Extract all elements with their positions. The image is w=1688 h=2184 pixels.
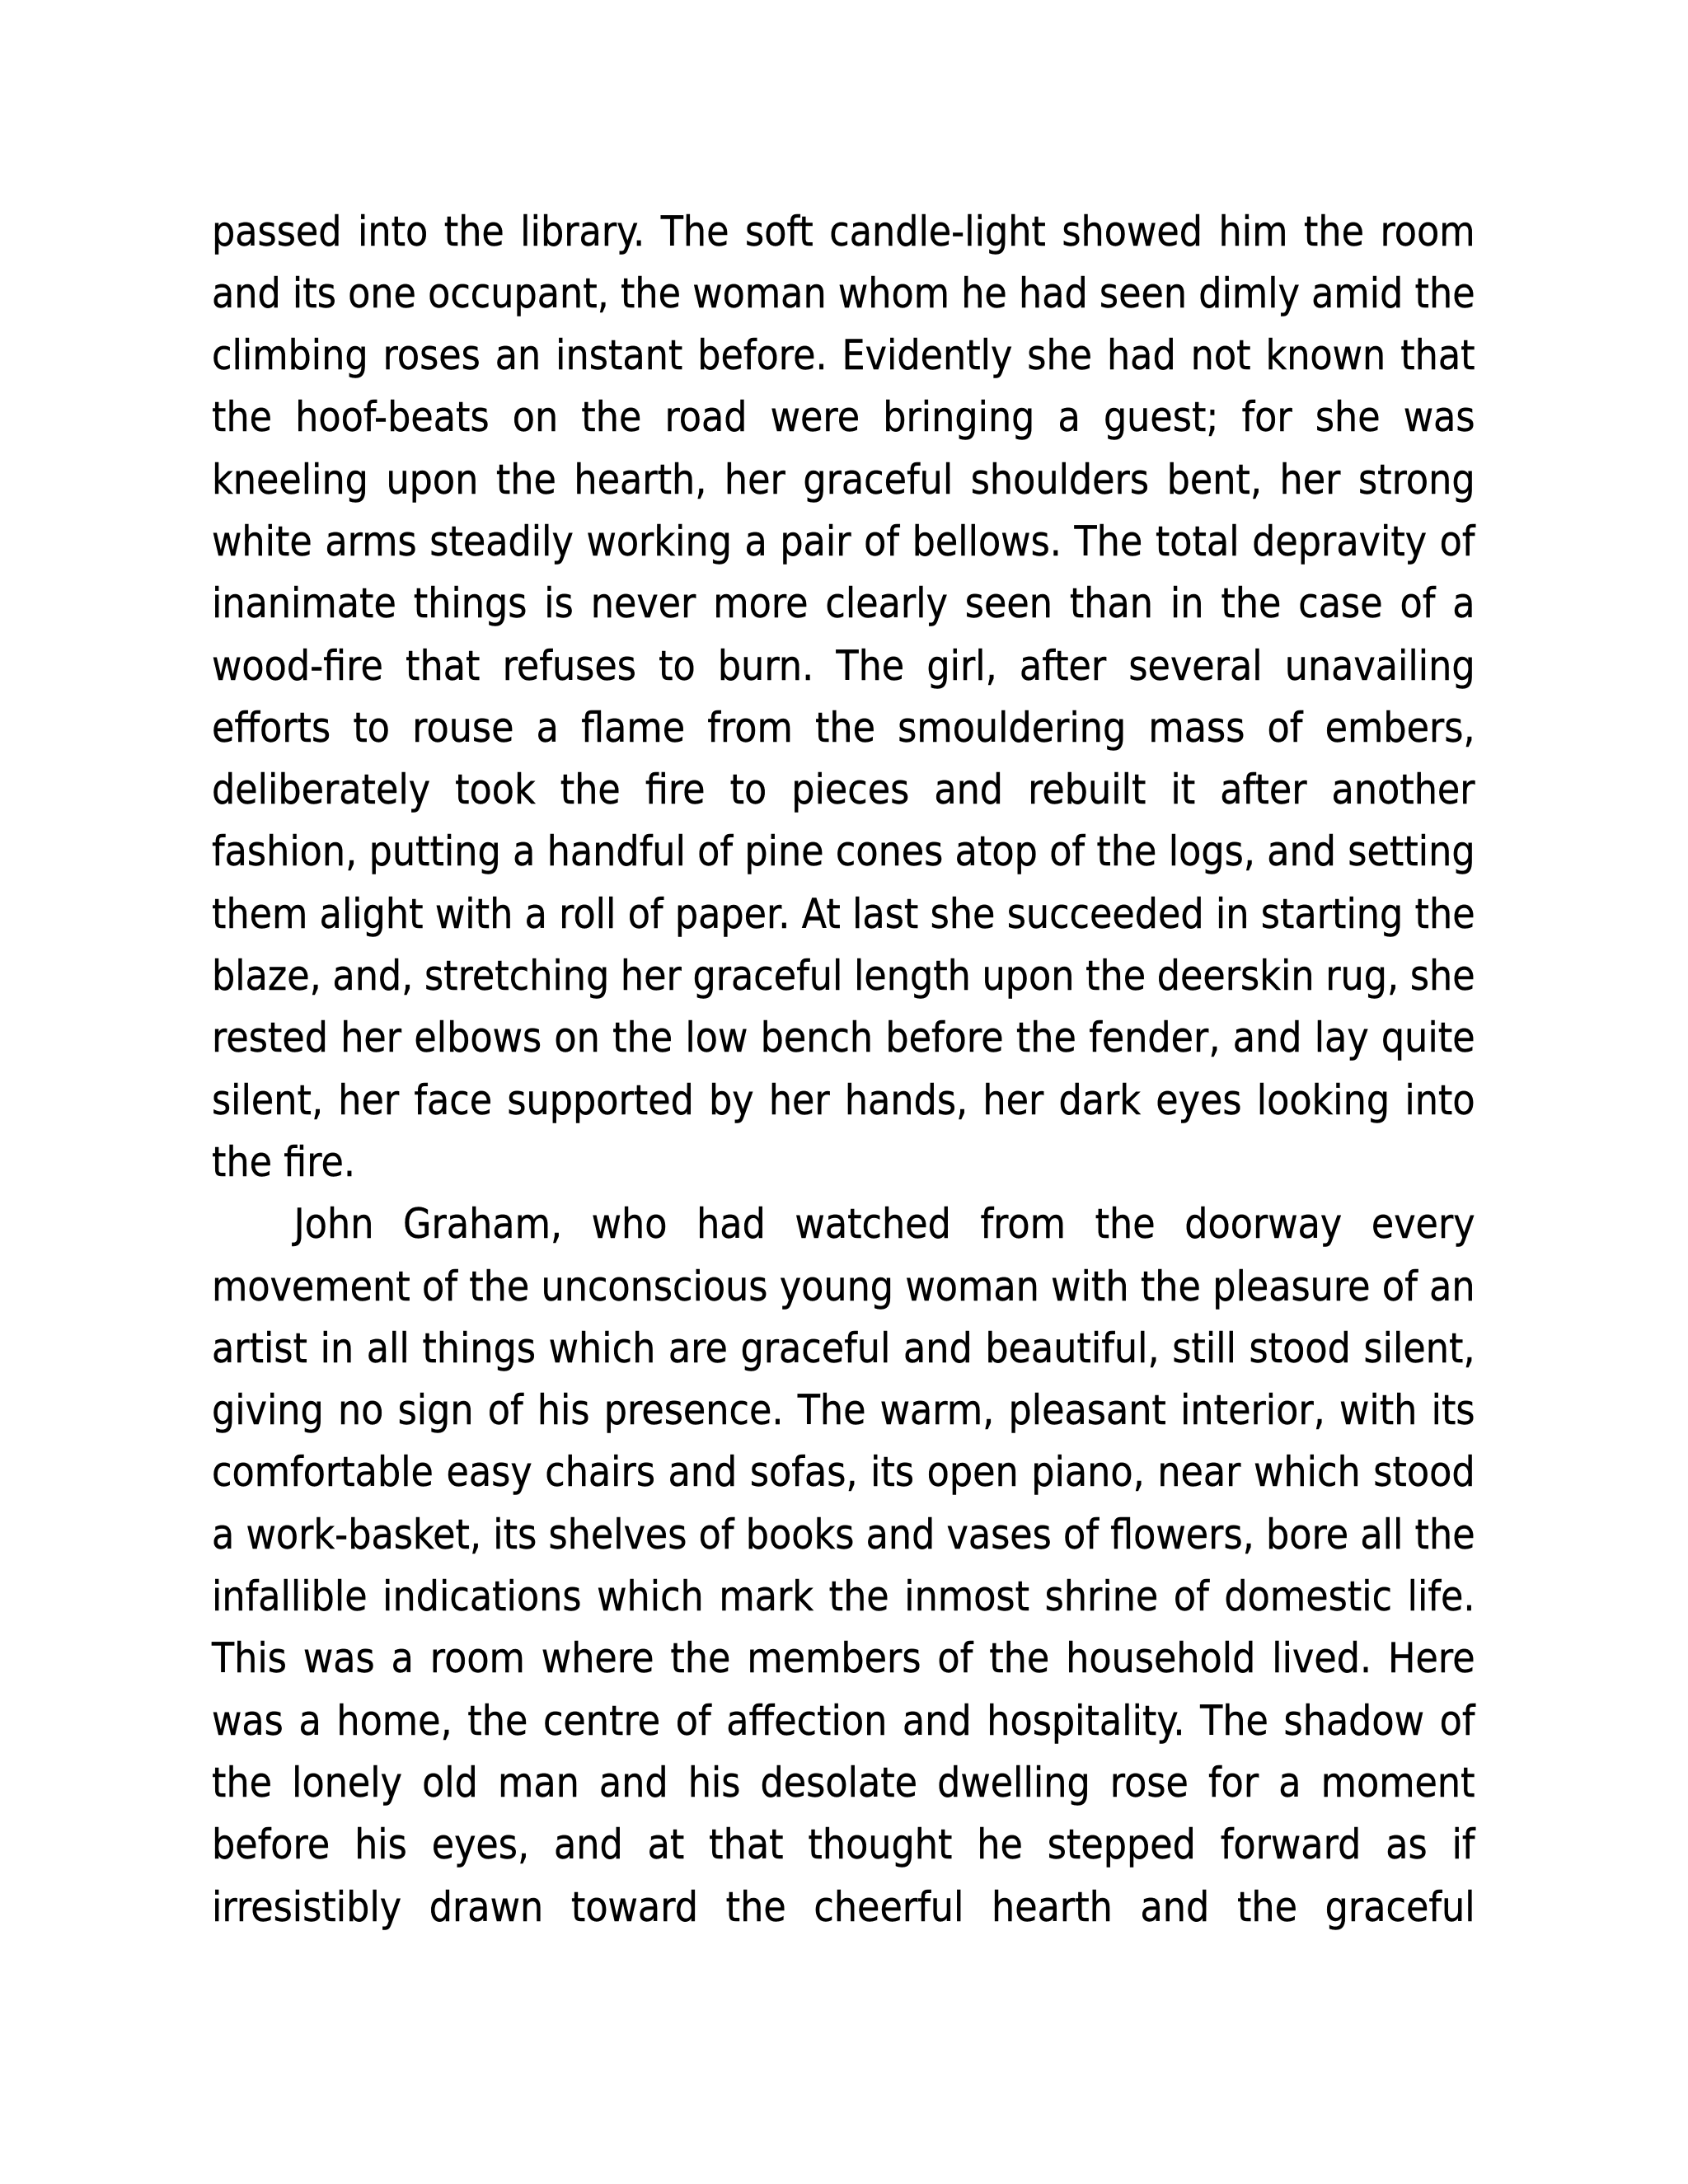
text block: first paragraph: efforts to rouse a flame from the smouldering mass of embers, <box>212 704 1475 752</box>
text block: first paragraph: fashion, putting a handful of pine cones atop of the logs, and setting <box>212 827 1475 875</box>
text block: first paragraph: inanimate things is never more clearly seen than in the case of a <box>212 579 1475 627</box>
text block: second paragraph: irresistibly drawn toward the cheerful hearth and the graceful <box>212 1883 1475 1931</box>
text block: second paragraph: comfortable easy chairs and sofas, its open piano, near which stood <box>212 1448 1475 1496</box>
text block: second paragraph: artist in all things which are graceful and beautiful, still stood silent, <box>212 1324 1475 1372</box>
text block: second paragraph: movement of the unconscious young woman with the pleasure of an <box>212 1263 1475 1310</box>
text block: first paragraph: blaze, and, stretching her graceful length upon the deerskin rug, she <box>212 952 1475 1000</box>
text block: first paragraph: them alight with a roll of paper. At last she succeeded in starting the <box>212 890 1475 938</box>
text block: second paragraph: was a home, the centre of affection and hospitality. The shadow of <box>212 1697 1475 1745</box>
text block: first paragraph: passed into the library. The soft candle-light showed him the room <box>212 208 1475 255</box>
text block: second paragraph: This was a room where the members of the household lived. Here <box>212 1634 1475 1682</box>
text block: second paragraph: before his eyes, and at that thought he stepped forward as if <box>212 1821 1475 1868</box>
text block: first paragraph: rested her elbows on the low bench before the fender, and lay quite <box>212 1014 1475 1062</box>
text block: first paragraph: the fire. <box>212 1138 355 1186</box>
text block: first paragraph: wood-fire that refuses to burn. The girl, after several unavailing <box>212 642 1475 690</box>
text block: first paragraph: the hoof-beats on the road were bringing a guest; for she was <box>212 393 1475 441</box>
text block: second paragraph: a work-basket, its shelves of books and vases of flowers, bore all the <box>212 1511 1475 1558</box>
text block: second paragraph: John Graham, who had watched from the doorway every <box>294 1200 1475 1248</box>
text block: first paragraph: climbing roses an instant before. Evidently she had not known that <box>212 331 1475 379</box>
text block: second paragraph: giving no sign of his presence. The warm, pleasant interior, with its <box>212 1386 1475 1434</box>
text block: first paragraph: white arms steadily working a pair of bellows. The total depravity of <box>212 518 1475 565</box>
text block: second paragraph: the lonely old man and his desolate dwelling rose for a moment <box>212 1759 1475 1807</box>
text block: second paragraph: infallible indications which mark the inmost shrine of domestic life. <box>212 1572 1475 1620</box>
text block: first paragraph: deliberately took the fire to pieces and rebuilt it after another <box>212 766 1475 813</box>
text block: first paragraph: kneeling upon the hearth, her graceful shoulders bent, her strong <box>212 456 1475 504</box>
text block: first paragraph: and its one occupant, the woman whom he had seen dimly amid the <box>212 269 1475 317</box>
text block: second paragraph <box>211 1200 1476 1931</box>
text block: first paragraph: silent, her face supported by her hands, her dark eyes looking into <box>212 1076 1475 1124</box>
text block: first paragraph <box>212 208 1476 1186</box>
